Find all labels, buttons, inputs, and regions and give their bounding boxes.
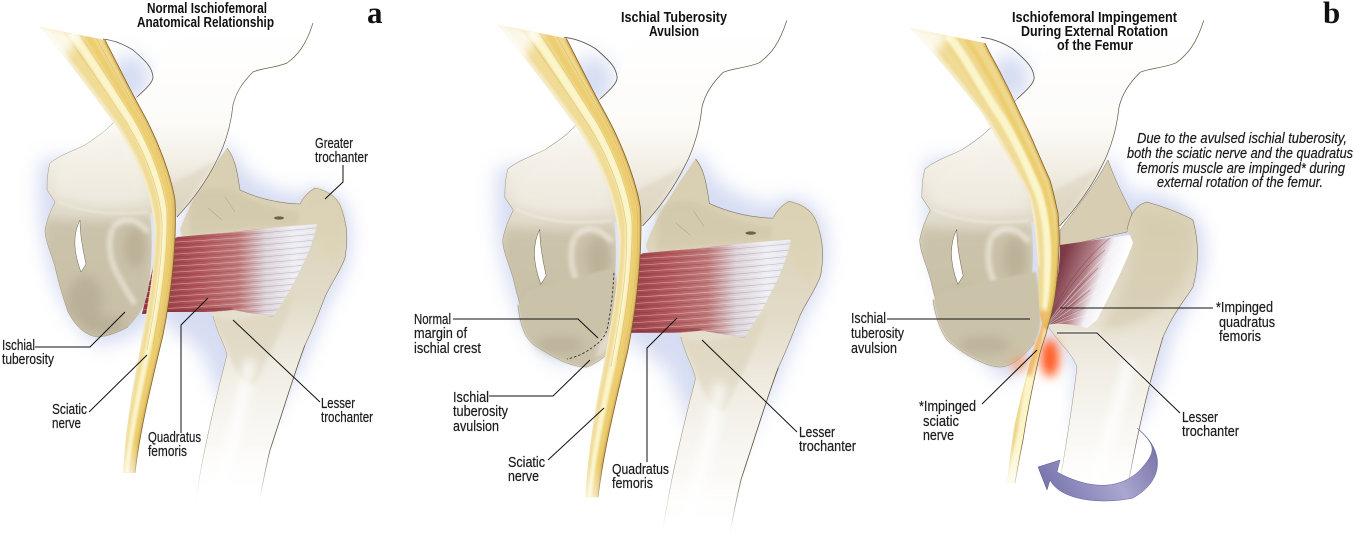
explanatory note — [1127, 130, 1353, 191]
label: sciatic nerve: Sciatic — [52, 402, 87, 418]
label: impinged sciatic nerve: *Impinged — [919, 399, 976, 415]
illustration: impingement with external rotation — [900, 20, 1205, 500]
label: lesser trochanter: trochanter — [321, 410, 373, 426]
title: normal relationship — [137, 1, 274, 31]
label: impinged quadratus femoris: quadratus — [1219, 315, 1275, 331]
label: lesser trochanter: Lesser — [799, 425, 835, 441]
label: quadratus femoris — [148, 298, 208, 460]
illustration: hip with avulsed tuberosity — [487, 15, 827, 537]
label: ischial tuberosity avulsion: tuberosity — [851, 326, 905, 342]
title: normal relationship: Anatomical Relationship — [137, 15, 274, 31]
label: ischial tuberosity avulsion: tuberosity — [453, 404, 509, 420]
label: impinged quadratus femoris: *Impinged — [1216, 300, 1273, 316]
label: lesser trochanter — [233, 320, 373, 426]
title: avulsion: Ischial Tuberosity — [621, 10, 727, 26]
title: impingement: During External Rotation — [1021, 24, 1168, 40]
title: impingement: Ischiofemoral Impingement — [1012, 10, 1177, 26]
label: ischial tuberosity avulsion: Ischial — [851, 311, 886, 327]
label: quadratus femoris: femoris — [612, 476, 653, 492]
label: sciatic nerve: nerve — [52, 416, 81, 432]
label: quadratus femoris: Quadratus — [148, 430, 201, 446]
label: greater trochanter — [315, 136, 368, 199]
label: sciatic nerve — [508, 408, 604, 485]
quadratus femoris, impinged — [1045, 235, 1133, 328]
label: ischial tuberosity avulsion: avulsion — [851, 341, 897, 357]
title: impingement — [1012, 10, 1177, 54]
label: greater trochanter: trochanter — [315, 150, 368, 166]
label: ischial tuberosity: tuberosity — [2, 352, 55, 368]
label: sciatic nerve: nerve — [508, 469, 539, 485]
illustration: normal hip anatomy — [30, 18, 351, 505]
label: ischial tuberosity: Ischial — [2, 338, 35, 354]
label: greater trochanter: Greater — [315, 136, 353, 152]
label: quadratus femoris: femoris — [148, 444, 187, 460]
title: avulsion — [621, 10, 727, 40]
label: lesser trochanter: trochanter — [799, 439, 856, 455]
label: lesser trochanter — [702, 340, 856, 455]
label: ischial tuberosity avulsion: Ischial — [453, 390, 489, 406]
label: impinged quadratus femoris — [1060, 300, 1275, 345]
label: ischial tuberosity avulsion — [851, 311, 1030, 357]
title: normal relationship: Normal Ischiofemoral — [147, 1, 267, 17]
label: quadratus femoris: Quadratus — [612, 462, 669, 478]
label: impinged quadratus femoris: femoris — [1219, 329, 1261, 345]
arrow: external rotation — [1038, 428, 1158, 501]
label: ischial tuberosity avulsion: avulsion — [453, 419, 499, 435]
panel: ischial tuberosity avulsion — [414, 10, 856, 537]
label: lesser trochanter — [1057, 333, 1239, 440]
label: impinged sciatic nerve: nerve — [923, 428, 954, 444]
label: normal margin of ischial crest: ischial crest — [414, 341, 481, 357]
inflammation glow at impingement site — [1010, 339, 1059, 377]
label: ischial tuberosity avulsion — [453, 360, 590, 435]
label: lesser trochanter: Lesser — [1182, 410, 1218, 426]
sciatic nerve, pinched — [900, 20, 1059, 483]
label: lesser trochanter: trochanter — [1182, 424, 1239, 440]
label: quadratus femoris — [612, 318, 677, 492]
label: ischial tuberosity — [2, 312, 125, 368]
title: avulsion: Avulsion — [649, 24, 699, 40]
label: lesser trochanter: Lesser — [321, 396, 355, 412]
label: sciatic nerve — [52, 355, 147, 432]
label: normal margin of ischial crest — [414, 312, 598, 357]
panel: normal ischiofemoral relationship — [2, 0, 383, 505]
panel: impingement during external rotation — [851, 0, 1353, 501]
label: sciatic nerve: Sciatic — [508, 455, 545, 471]
title: impingement: of the Femur — [1057, 38, 1133, 54]
label: normal margin of ischial crest: Normal — [414, 312, 451, 328]
label: impinged sciatic nerve: sciatic — [923, 414, 959, 430]
label: normal margin of ischial crest: margin of — [414, 326, 468, 342]
explanatory note: external rotation of the femur. — [1157, 174, 1323, 191]
label: impinged sciatic nerve — [919, 350, 1037, 444]
